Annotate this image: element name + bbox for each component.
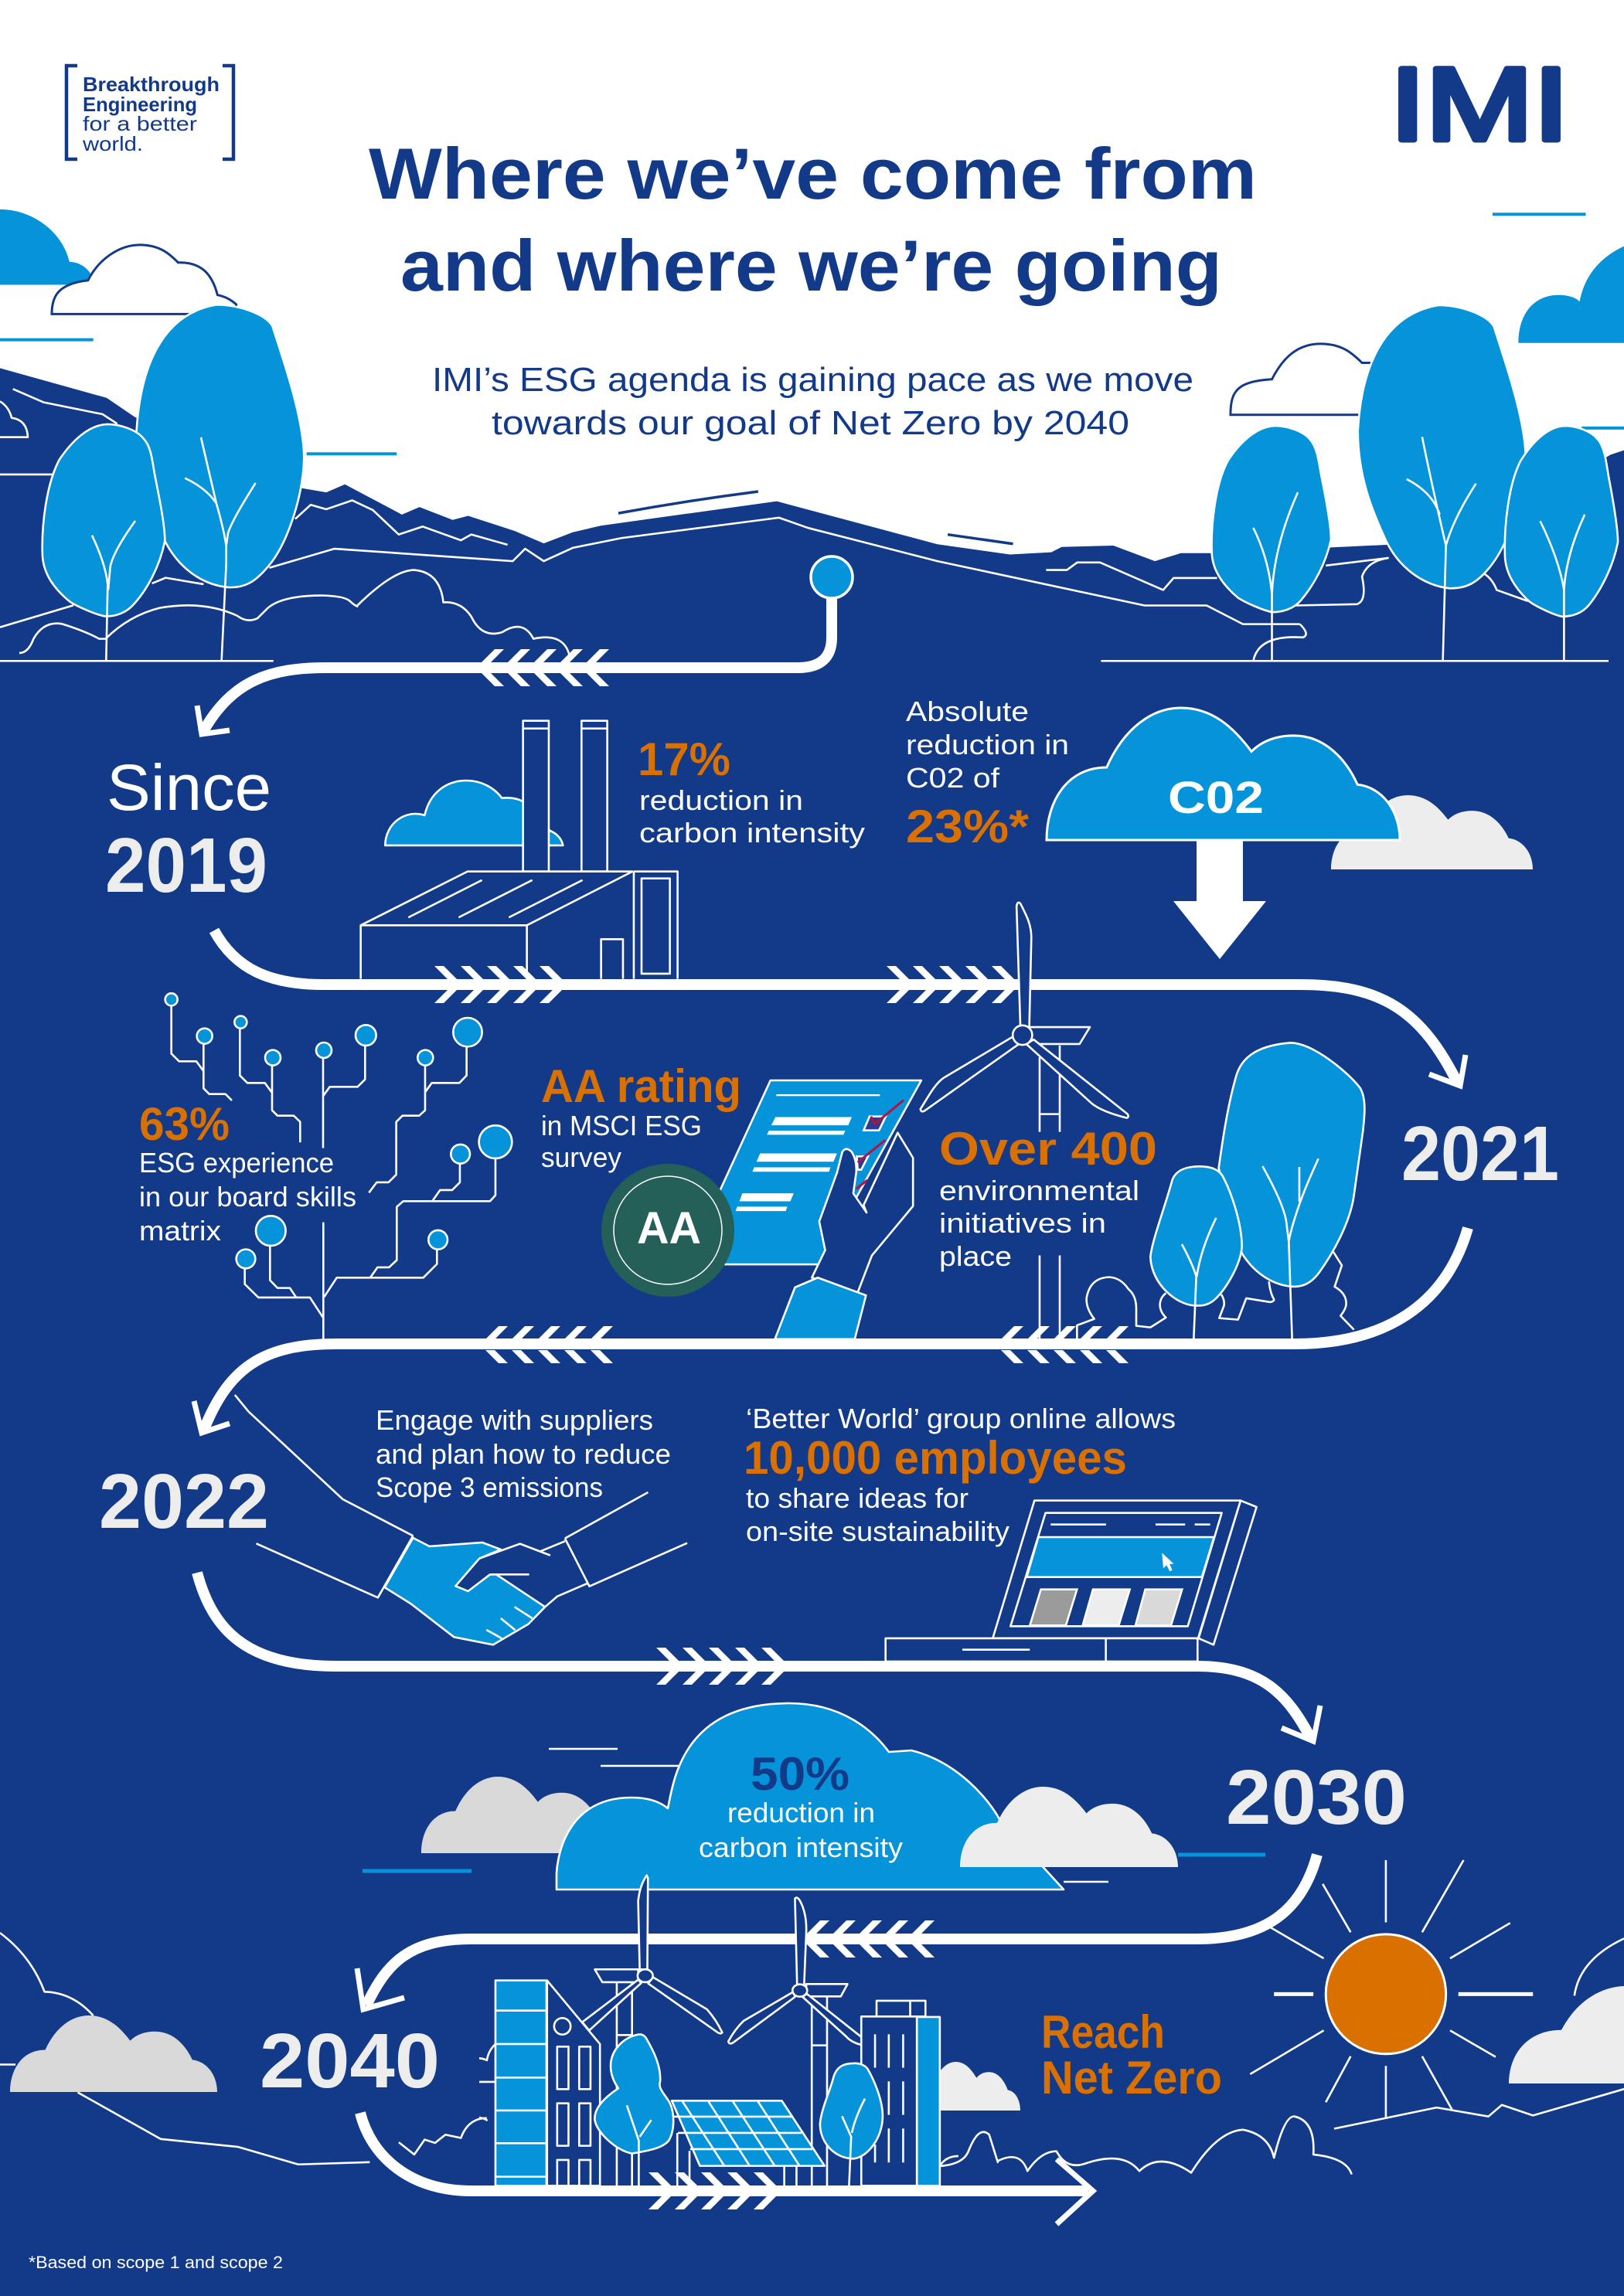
chevrons: road 2 factory (434, 966, 562, 1003)
chevrons: road 4 (656, 1648, 784, 1685)
stat: 17% reduction: 17% (638, 733, 730, 785)
small outlines (479, 2044, 958, 2167)
tree: right small (1212, 426, 1331, 661)
tree: left small (43, 424, 165, 661)
left hill lines (0, 389, 358, 653)
ground lines (0, 660, 1609, 662)
road marker: start circle (811, 556, 853, 598)
arm lines (235, 1395, 687, 1597)
stat: 17% reduction: carbon intensity (639, 817, 865, 849)
stat: over 400 initiatives: environmental (939, 1175, 1139, 1206)
turbine B (728, 1898, 873, 2046)
chevrons: road 5 (807, 1920, 935, 1958)
bush outlines (1077, 1252, 1354, 1339)
screen frame (1199, 1501, 1257, 1645)
tree: far right (1505, 426, 1618, 661)
tree: right large (1358, 305, 1526, 661)
cloud: C02 (1047, 708, 1400, 840)
other hand outline and fingers (479, 1541, 588, 1638)
tiles (1030, 1590, 1077, 1625)
logo: Breakthrough Engineering: world. (82, 132, 143, 155)
stat: 17% reduction (638, 733, 865, 849)
navy lower background (0, 618, 1624, 2296)
road: 2040 onward (360, 2113, 1093, 2224)
factory cloud (385, 781, 563, 845)
footnote: *Based on scope 1 and scope 2 (29, 2253, 283, 2272)
stat: absolute reduction 23%: Absolute (906, 696, 1029, 727)
badge: AA: AA (637, 1203, 701, 1253)
stat: AA rating (541, 1060, 741, 1173)
text: engage with suppliers: Engage with suppliers (376, 1404, 653, 1436)
chevrons: road 1 (482, 649, 609, 686)
cloud label: C02: C02 (1168, 773, 1264, 823)
factory building (361, 872, 678, 979)
hill contour lines (269, 500, 1527, 661)
label: Since 2019: Since (107, 751, 271, 824)
stat: AA rating: AA rating (541, 1060, 741, 1112)
road: 2022 to 2030 (197, 1573, 1320, 1741)
red checks (856, 1100, 904, 1189)
turbine nacelle and blades (921, 903, 1129, 1118)
small tree trunk (1182, 1218, 1216, 1339)
turbine towers (617, 1982, 827, 2185)
turbine A (582, 1876, 722, 2033)
stat: 63% board skills: 63% (139, 1098, 230, 1150)
blue block building (495, 1981, 546, 2185)
stat: AA rating: survey (541, 1141, 621, 1173)
chevrons: road 6 (649, 2172, 776, 2209)
cloud: grey right (960, 1787, 1178, 1867)
cloud: right outline (1231, 344, 1377, 415)
text: engage with suppliers: Scope 3 emissions (376, 1471, 603, 1503)
right hills and wiggle line (0, 1933, 1624, 2175)
stat: over 400 initiatives (939, 1123, 1157, 1272)
stat: reach net zero (1041, 2006, 1222, 2104)
sleeve (775, 1277, 866, 1339)
cloud: large blue (557, 1703, 1064, 1890)
large tree trunk (1262, 1158, 1319, 1339)
label: 2030: 2030 (1226, 1754, 1407, 1841)
logo: Breakthrough Engineering: Breakthrough (83, 73, 220, 96)
tree A (594, 2034, 673, 2185)
stat: absolute reduction 23% (906, 696, 1069, 852)
stat: reach net zero: Reach (1041, 2006, 1165, 2058)
solar panel (672, 2100, 825, 2185)
logo: Breakthrough Engineering: for a better (83, 112, 197, 135)
illustration: sun and landscape (0, 1860, 1624, 2175)
subtitle: IMI’s ESG agenda is gaining pace as we move (432, 361, 1193, 399)
illustration: circuit tree (165, 993, 512, 1341)
road: 2030 to 2040 (357, 1855, 1317, 2009)
sun disc (1326, 1934, 1446, 2054)
illustration: laptop (886, 1501, 1257, 1662)
stat: absolute reduction 23%: reduction in (906, 729, 1069, 760)
stat: 50% reduction: 50% (751, 1748, 849, 1800)
subtitle (432, 361, 1193, 442)
label: Since 2019 (105, 751, 271, 909)
stat: 50% reduction: carbon intensity (699, 1832, 903, 1863)
stat: AA rating: in MSCI ESG (541, 1110, 702, 1141)
stat: over 400 initiatives: Over 400 (939, 1123, 1157, 1175)
circuit lines (172, 1005, 495, 1341)
illustration: tree cluster 2021 (1077, 1043, 1364, 1339)
label: 2021: 2021 (1401, 1111, 1559, 1197)
laptop base (886, 1638, 1197, 1662)
road: start to 2019 (197, 599, 832, 734)
stat: 50% reduction: reduction in (727, 1797, 875, 1828)
logo: Breakthrough Engineering (66, 66, 233, 159)
illustration: document, hand and wind turbine (686, 903, 1129, 1339)
label: 2040: 2040 (260, 2018, 440, 2104)
cloud: top right blue (1518, 247, 1624, 343)
landscape header with hills and right trees (0, 209, 1624, 696)
document (686, 1080, 921, 1264)
cloud: bottom left grey (10, 2015, 217, 2092)
stat: 10,000 employees: on-site sustainability (746, 1515, 1009, 1547)
subtitle: towards our goal of Net Zero by 2040 (492, 404, 1129, 442)
turbine tower (1040, 1046, 1060, 1339)
illustration: factory (361, 721, 678, 979)
stat: 10,000 employees: to share ideas for (746, 1482, 969, 1514)
illustration: handshake (235, 1395, 687, 1645)
cloud: grey left (421, 1777, 622, 1853)
label: 2022: 2022 (99, 1458, 269, 1545)
text: engage with suppliers (376, 1404, 671, 1503)
hills silhouette (0, 368, 1624, 696)
stat: absolute reduction 23%: C02 of (906, 762, 1000, 794)
stat: reach net zero: Net Zero (1041, 2052, 1222, 2104)
cloud: grey behind C02 (1331, 795, 1533, 869)
large tree (1219, 1043, 1364, 1287)
stat: 63% board skills: in our board skills (139, 1181, 356, 1213)
label: Since 2019: 2019 (105, 822, 267, 909)
text: engage with suppliers: and plan how to reduce (376, 1438, 671, 1470)
arrow: C02 down (1173, 840, 1266, 959)
title: and where we’re going (400, 225, 1222, 306)
cloud group: 2030 (363, 1703, 1265, 1890)
cloud: top left outline (52, 245, 237, 314)
chevrons: road 3 left (485, 1326, 613, 1363)
stat: 50% reduction (699, 1748, 903, 1863)
gabled house (547, 1981, 600, 2185)
hill accent strokes (618, 492, 1013, 544)
left header trees and hill lines (0, 304, 358, 661)
stat: 10,000 employees: ‘Better World’ group online allows (746, 1403, 1176, 1434)
stat: 10,000 employees (744, 1403, 1176, 1547)
stat: 63% board skills: matrix (139, 1215, 221, 1247)
title (369, 133, 1257, 306)
stat: 63% board skills (139, 1098, 356, 1247)
right tower (861, 2001, 925, 2185)
circuit nodes (165, 993, 512, 1268)
check boxes (863, 1117, 886, 1131)
logo: Breakthrough Engineering: Engineering (83, 93, 197, 116)
chimneys (523, 721, 608, 872)
cloud: top left blue (0, 209, 95, 285)
road: 2019 to 2021 (214, 930, 1466, 1086)
stat: 17% reduction: reduction in (639, 784, 803, 816)
stat: over 400 initiatives: initiatives in (939, 1207, 1106, 1239)
stat: 10,000 employees: 10,000 employees (744, 1432, 1127, 1484)
cursor (1162, 1553, 1173, 1571)
sun rays (1250, 1860, 1533, 2117)
stat: 63% board skills: ESG experience (139, 1147, 334, 1179)
badge: AA (601, 1164, 734, 1297)
hand (812, 1133, 913, 1292)
title: Where we’ve come from (369, 133, 1257, 214)
chevrons: road 3 right (1001, 1326, 1129, 1363)
cloud: bottom right grey (1509, 1986, 1624, 2083)
document lines (736, 1094, 880, 1211)
stat: absolute reduction 23%: 23%* (906, 801, 1030, 852)
blue hand (385, 1538, 545, 1645)
tree B (820, 2063, 883, 2185)
cloud: behind city (916, 2062, 1020, 2111)
header lines (1050, 1523, 1210, 1526)
sky accent lines (0, 214, 1624, 454)
small tree (1150, 1166, 1242, 1306)
road: 2021 to 2022 (194, 1228, 1468, 1433)
logo: IMI: IMI (1390, 47, 1569, 162)
tree: left large (137, 304, 304, 661)
illustration: city with turbines, trees and solar panel (479, 1876, 958, 2185)
accent lines (549, 1749, 1108, 1882)
stat: over 400 initiatives: place (939, 1240, 1012, 1272)
chevrons: road 2 turbine (887, 966, 1014, 1003)
web banner (1026, 1537, 1214, 1577)
